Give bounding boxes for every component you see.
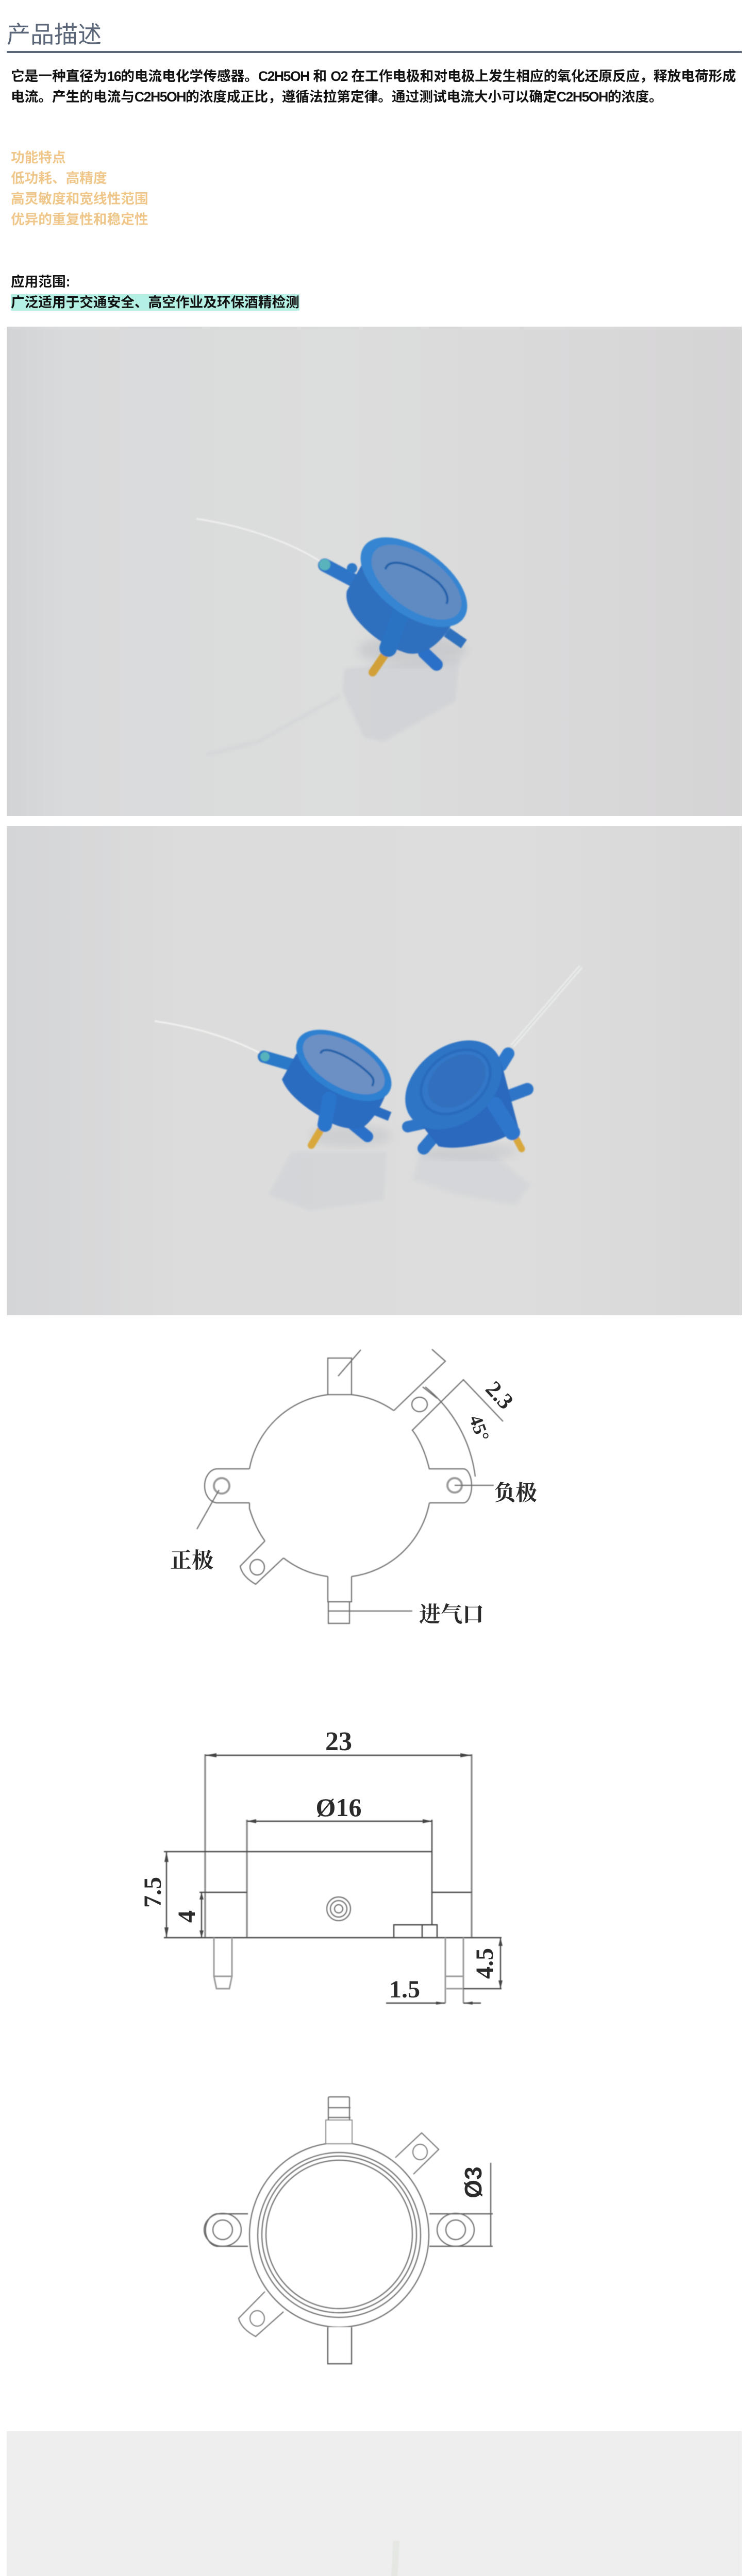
text block: description [11, 69, 736, 105]
text block: application highlight: 广泛适用于交通安全、高空作业及环保酒精检测 [11, 295, 299, 310]
text block: features: 功能特点 [11, 150, 66, 165]
label: air inlet: 进气口 [419, 1603, 484, 1627]
label: negative electrode: 负极 [494, 1481, 537, 1505]
diagram: side view with dimensions [139, 1731, 503, 2005]
photo: single sensor [7, 327, 742, 816]
text block: features: 低功耗、高精度 [11, 171, 107, 186]
label: positive electrode: 正极 [170, 1549, 213, 1573]
dimension: diameter 16: Ø16 [316, 1793, 361, 1822]
dimension: 45 degrees: 45° [465, 1412, 493, 1444]
text block: description: 它是一种直径为16的电流电化学传感器。C2H5OH 和 O2 在工作电极和对电极上发生相应的氧化还原反应，释放电荷形成 [11, 69, 736, 84]
diagram: bottom view [203, 2096, 493, 2365]
text block: features: 优异的重复性和稳定性 [11, 212, 148, 227]
text block: application heading: 应用范围: [11, 274, 71, 290]
dimension: 4.5: 4.5 [471, 1948, 498, 1979]
diagram: top view with electrodes [170, 1349, 537, 1627]
dimension: 4: 4 [173, 1910, 201, 1923]
dimension: 2.3: 2.3 [480, 1376, 519, 1414]
dimension: diameter 3: Ø3 [460, 2166, 487, 2198]
heading: product description: 产品描述 [7, 21, 102, 48]
heading: product description [7, 18, 742, 53]
text block: features: 高灵敏度和宽线性范围 [11, 191, 148, 207]
photo: sensor close-up [7, 2431, 742, 2576]
text block: description: 电流。产生的电流与C2H5OH的浓度成正比，遵循法拉第定律。通过测试电流大小可以确定C2H5OH的浓度。 [11, 89, 663, 105]
photo: two sensors [7, 826, 742, 1315]
text block: features [11, 150, 148, 227]
dimension: 1.5: 1.5 [389, 1976, 420, 2003]
dimension: 7.5: 7.5 [139, 1877, 166, 1908]
